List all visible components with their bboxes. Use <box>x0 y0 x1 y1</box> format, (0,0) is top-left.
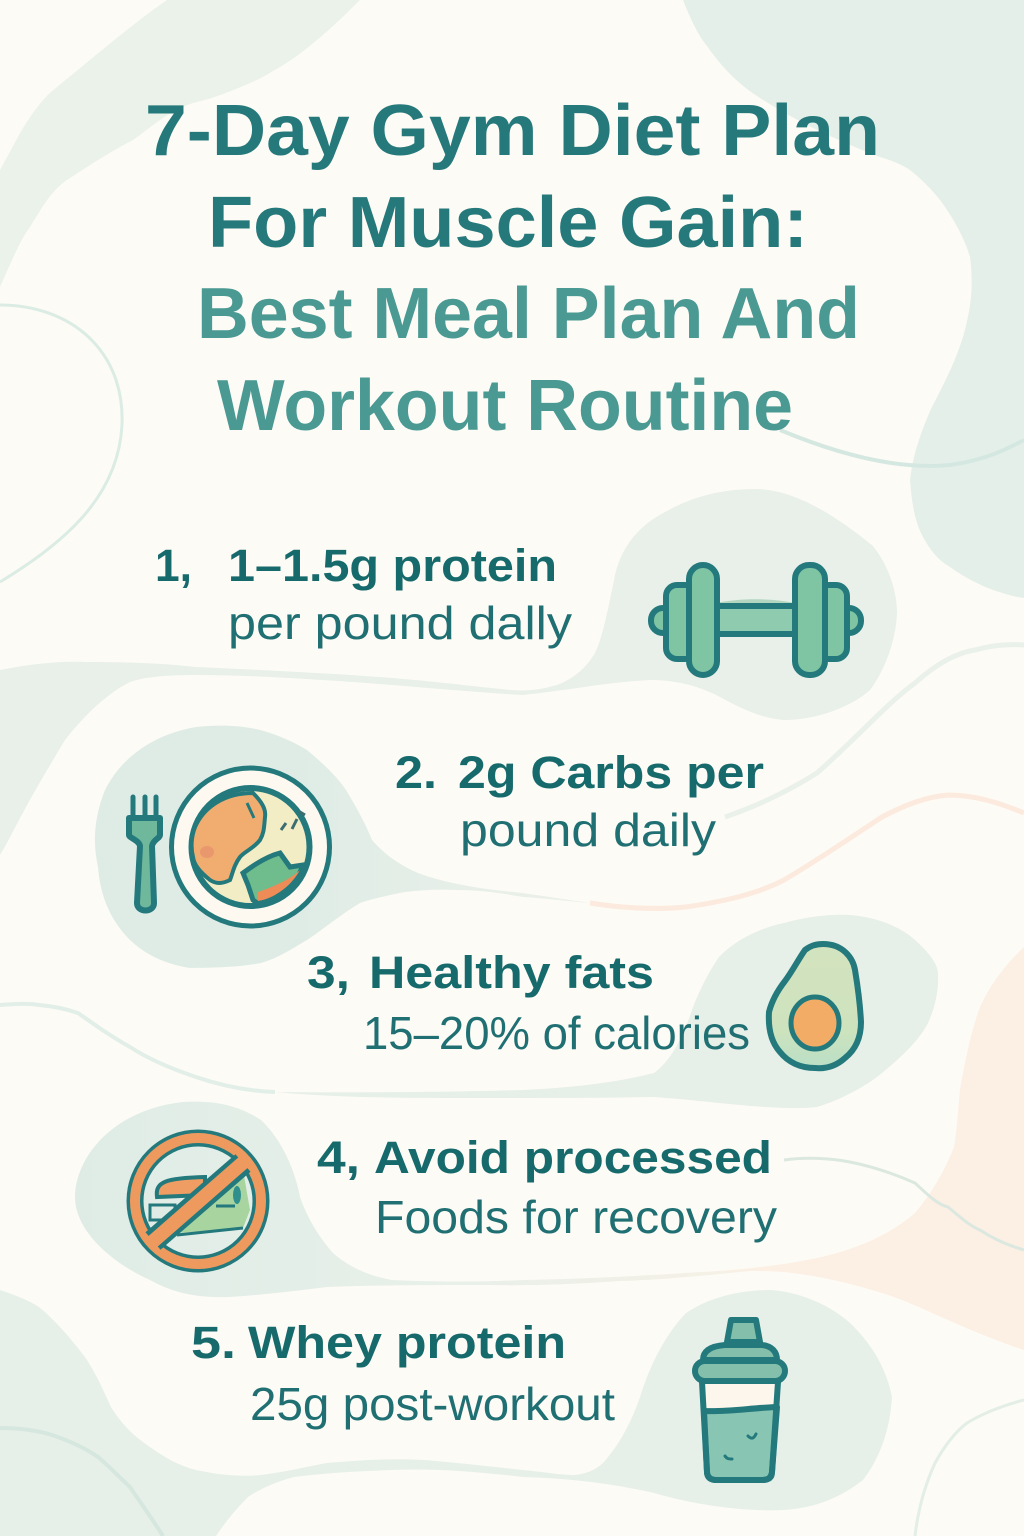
item 5 text: whey: Whey protein <box>248 1317 566 1368</box>
subtitle <box>197 274 860 446</box>
item 4 text: processed foods: 4, <box>317 1132 360 1183</box>
icon: no processed food <box>135 1138 261 1264</box>
item 5 text: whey: 25g post-workout <box>250 1378 615 1430</box>
item 2 text: carbs: 2g Carbs per <box>458 747 764 798</box>
icon: avocado <box>769 944 861 1068</box>
title <box>145 91 880 263</box>
icon: plate and fork <box>129 768 330 926</box>
item 1 text: protein: 1–1.5g protein <box>228 540 557 591</box>
item 3 text: fats: Healthy fats <box>369 947 654 998</box>
item 4 text: processed foods: Avoid processed <box>374 1132 772 1183</box>
plate <box>172 768 330 926</box>
item 2 text: carbs <box>395 747 764 856</box>
item 3 text: fats: 15–20% of calories <box>363 1007 750 1059</box>
item 2 text: carbs: 2. <box>395 747 437 798</box>
item 1 text: protein <box>155 540 572 649</box>
item 3 text: fats: 3, <box>307 947 350 998</box>
title: For Muscle Gain: <box>208 183 808 263</box>
item 4 text: processed foods: Foods for recovery <box>375 1191 777 1243</box>
icon: protein shaker <box>695 1320 785 1480</box>
item 3 text: fats <box>307 947 750 1059</box>
item 5 text: whey <box>191 1317 615 1430</box>
title: 7-Day Gym Diet Plan <box>145 91 880 171</box>
subtitle: Workout Routine <box>217 366 793 446</box>
item 1 text: protein: 1, <box>155 540 192 591</box>
item 5 text: whey: 5. <box>191 1317 236 1368</box>
item 1 text: protein: per pound dally <box>228 597 572 649</box>
fork <box>129 797 160 910</box>
subtitle: Best Meal Plan And <box>197 274 860 354</box>
icon: dumbbell <box>651 565 861 675</box>
item 2 text: carbs: pound daily <box>460 804 716 856</box>
item 4 text: processed foods <box>317 1132 777 1243</box>
